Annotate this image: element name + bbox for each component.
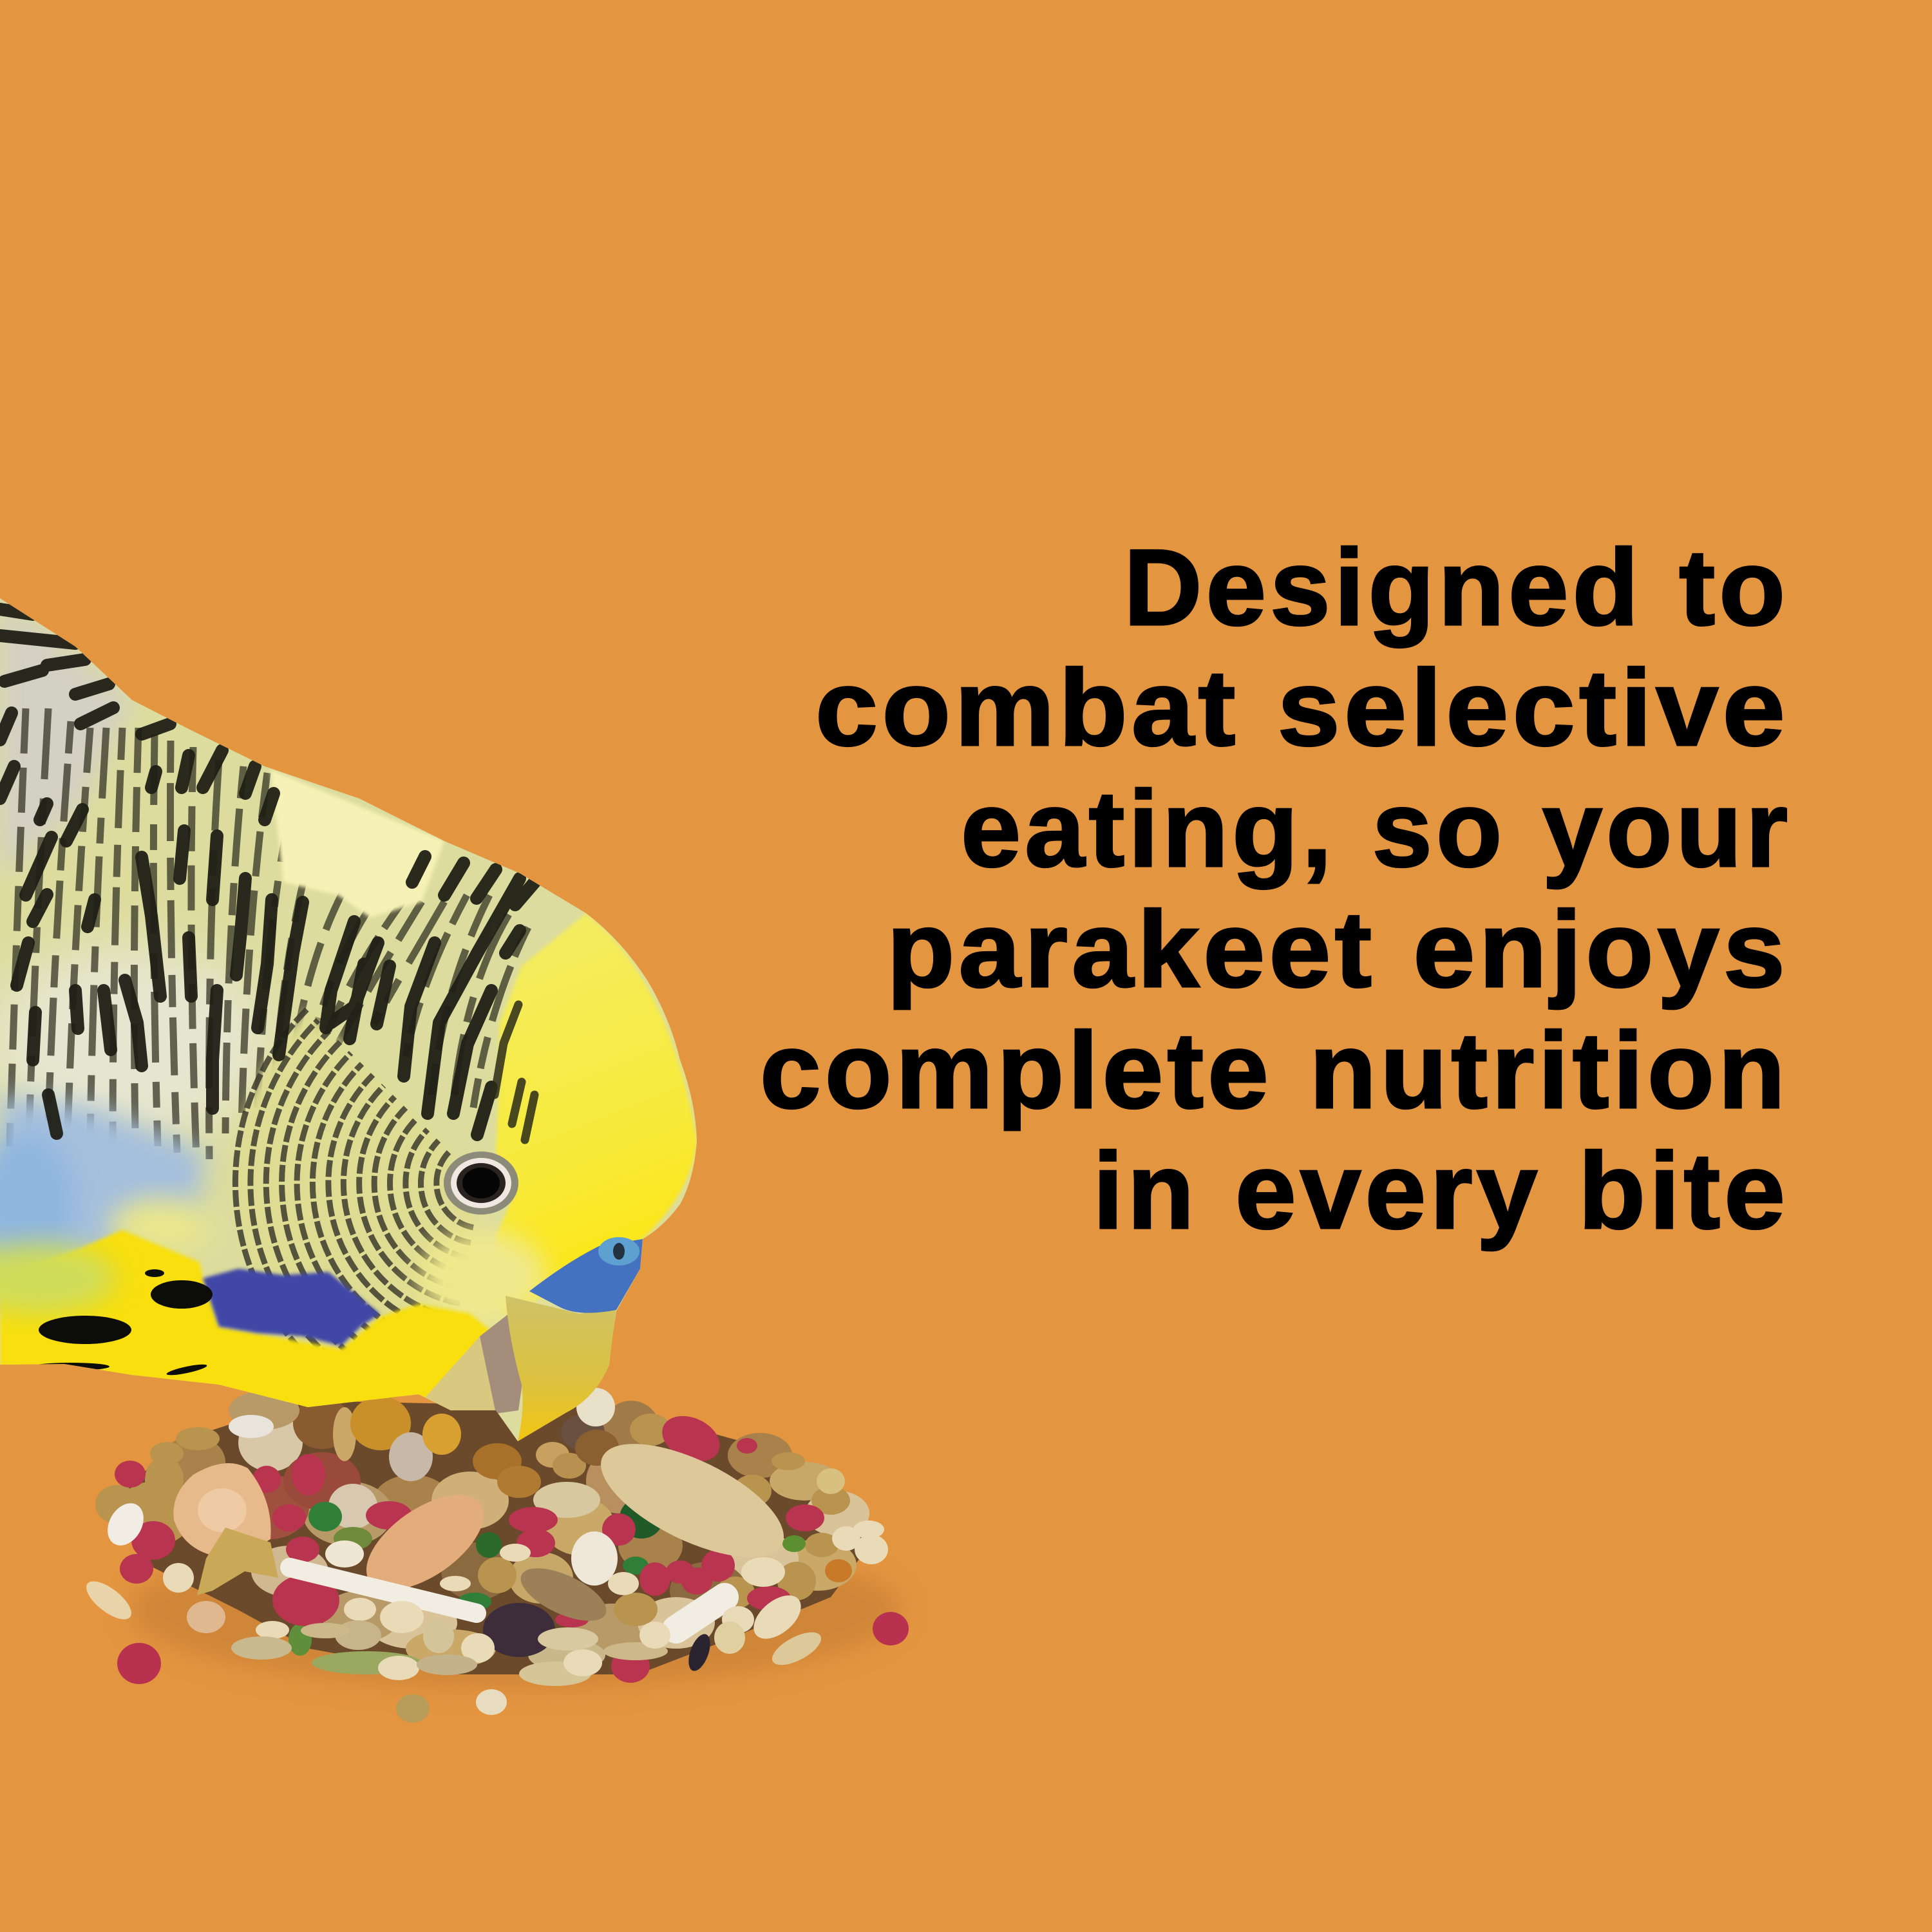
headline text — [760, 527, 1792, 1251]
pile shadow — [129, 1533, 902, 1687]
pale whitish breast band — [0, 947, 270, 1140]
top cluster under beak — [229, 1388, 619, 1529]
headline text: parakeet enjoys — [887, 889, 1789, 1010]
green flakes — [289, 1497, 806, 1674]
headline text: combat selective — [815, 647, 1789, 768]
big wafer — [585, 1421, 799, 1580]
pale yellow upper chest — [109, 1198, 213, 1256]
pale throat feathers — [419, 1230, 547, 1327]
grey back feathers — [0, 598, 132, 876]
yellow chest — [0, 1230, 509, 1417]
lower mandible — [425, 1336, 496, 1414]
tan kibble — [95, 1414, 852, 1626]
dark seeds — [483, 1557, 714, 1674]
mouth — [480, 1314, 525, 1414]
eye — [444, 1151, 518, 1215]
dense fine back barring — [10, 708, 528, 1159]
upper beak — [506, 1296, 616, 1441]
body base colour — [0, 580, 708, 1449]
yellow head — [496, 913, 697, 1314]
headline text: Designed to — [1124, 527, 1789, 648]
pale nape patch — [270, 770, 444, 918]
sponge kibble — [197, 1528, 278, 1595]
seed and pellet pile — [80, 1388, 909, 1723]
headline text: complete nutrition — [760, 1010, 1789, 1131]
parakeet — [0, 580, 708, 1449]
pile base — [109, 1401, 869, 1674]
filler grains — [116, 1391, 869, 1671]
red pellets — [115, 1407, 824, 1683]
green yellow chest tint — [0, 1243, 116, 1314]
coconut strips — [290, 1567, 724, 1629]
cream seeds — [100, 1468, 888, 1686]
blue belly feathers — [0, 1095, 206, 1294]
purple cheek patch — [203, 1269, 380, 1346]
cheek barring around the eye — [235, 1009, 473, 1425]
cere — [529, 1239, 643, 1313]
panel: orange background with artwork — [0, 545, 1787, 1723]
back stripes — [0, 609, 535, 1135]
headline text: eating, so your — [961, 768, 1792, 889]
headline text: in every bite — [1093, 1130, 1789, 1251]
cheek base — [235, 1009, 481, 1425]
black throat spots — [32, 1269, 213, 1378]
head edge stripes — [495, 1005, 535, 1140]
illustration canvas — [0, 545, 1787, 1723]
dried fruit pieces — [173, 1463, 500, 1609]
loose food pieces — [80, 1575, 909, 1723]
